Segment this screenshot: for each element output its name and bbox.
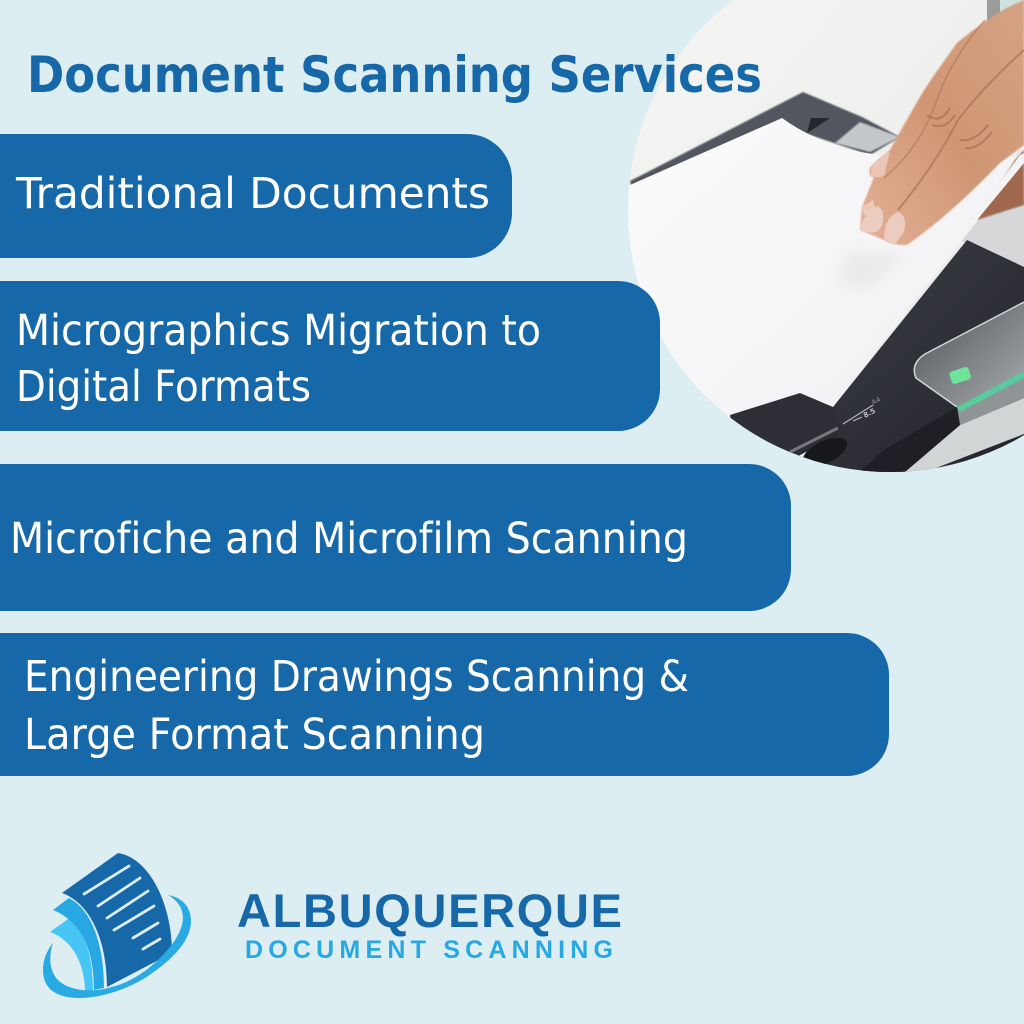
panel: traditional documents: [0, 134, 512, 258]
photo: hand feeding paper into scanner: A4: [870, 395, 883, 407]
panel: micrographics migration: Micrographics Migration to: [16, 306, 541, 356]
panel: engineering drawings: Large Format Scanning: [24, 710, 485, 760]
panel: engineering drawings: Engineering Drawings Scanning &: [24, 652, 689, 702]
panel: traditional documents: Traditional Documents: [15, 169, 490, 219]
logo wordmark: ALBUQUERQUE: [237, 884, 622, 937]
panel: micrographics migration: Digital Formats: [16, 362, 311, 412]
photo: hand feeding paper into scanner: 8.5: [862, 407, 877, 420]
photo: hand feeding paper into scanner: [620, 0, 1024, 480]
panel: microfiche and microfilm: Microfiche and Microfilm Scanning: [10, 514, 688, 564]
panel: microfiche and microfilm: [0, 464, 791, 611]
title: Document Scanning Services: [27, 46, 762, 104]
logo tagline: DOCUMENT SCANNING: [245, 936, 613, 964]
panel: engineering drawings: [0, 633, 889, 776]
logo: [43, 853, 622, 998]
panel: micrographics migration: [0, 281, 660, 431]
icon: document with swoosh: [43, 853, 191, 998]
